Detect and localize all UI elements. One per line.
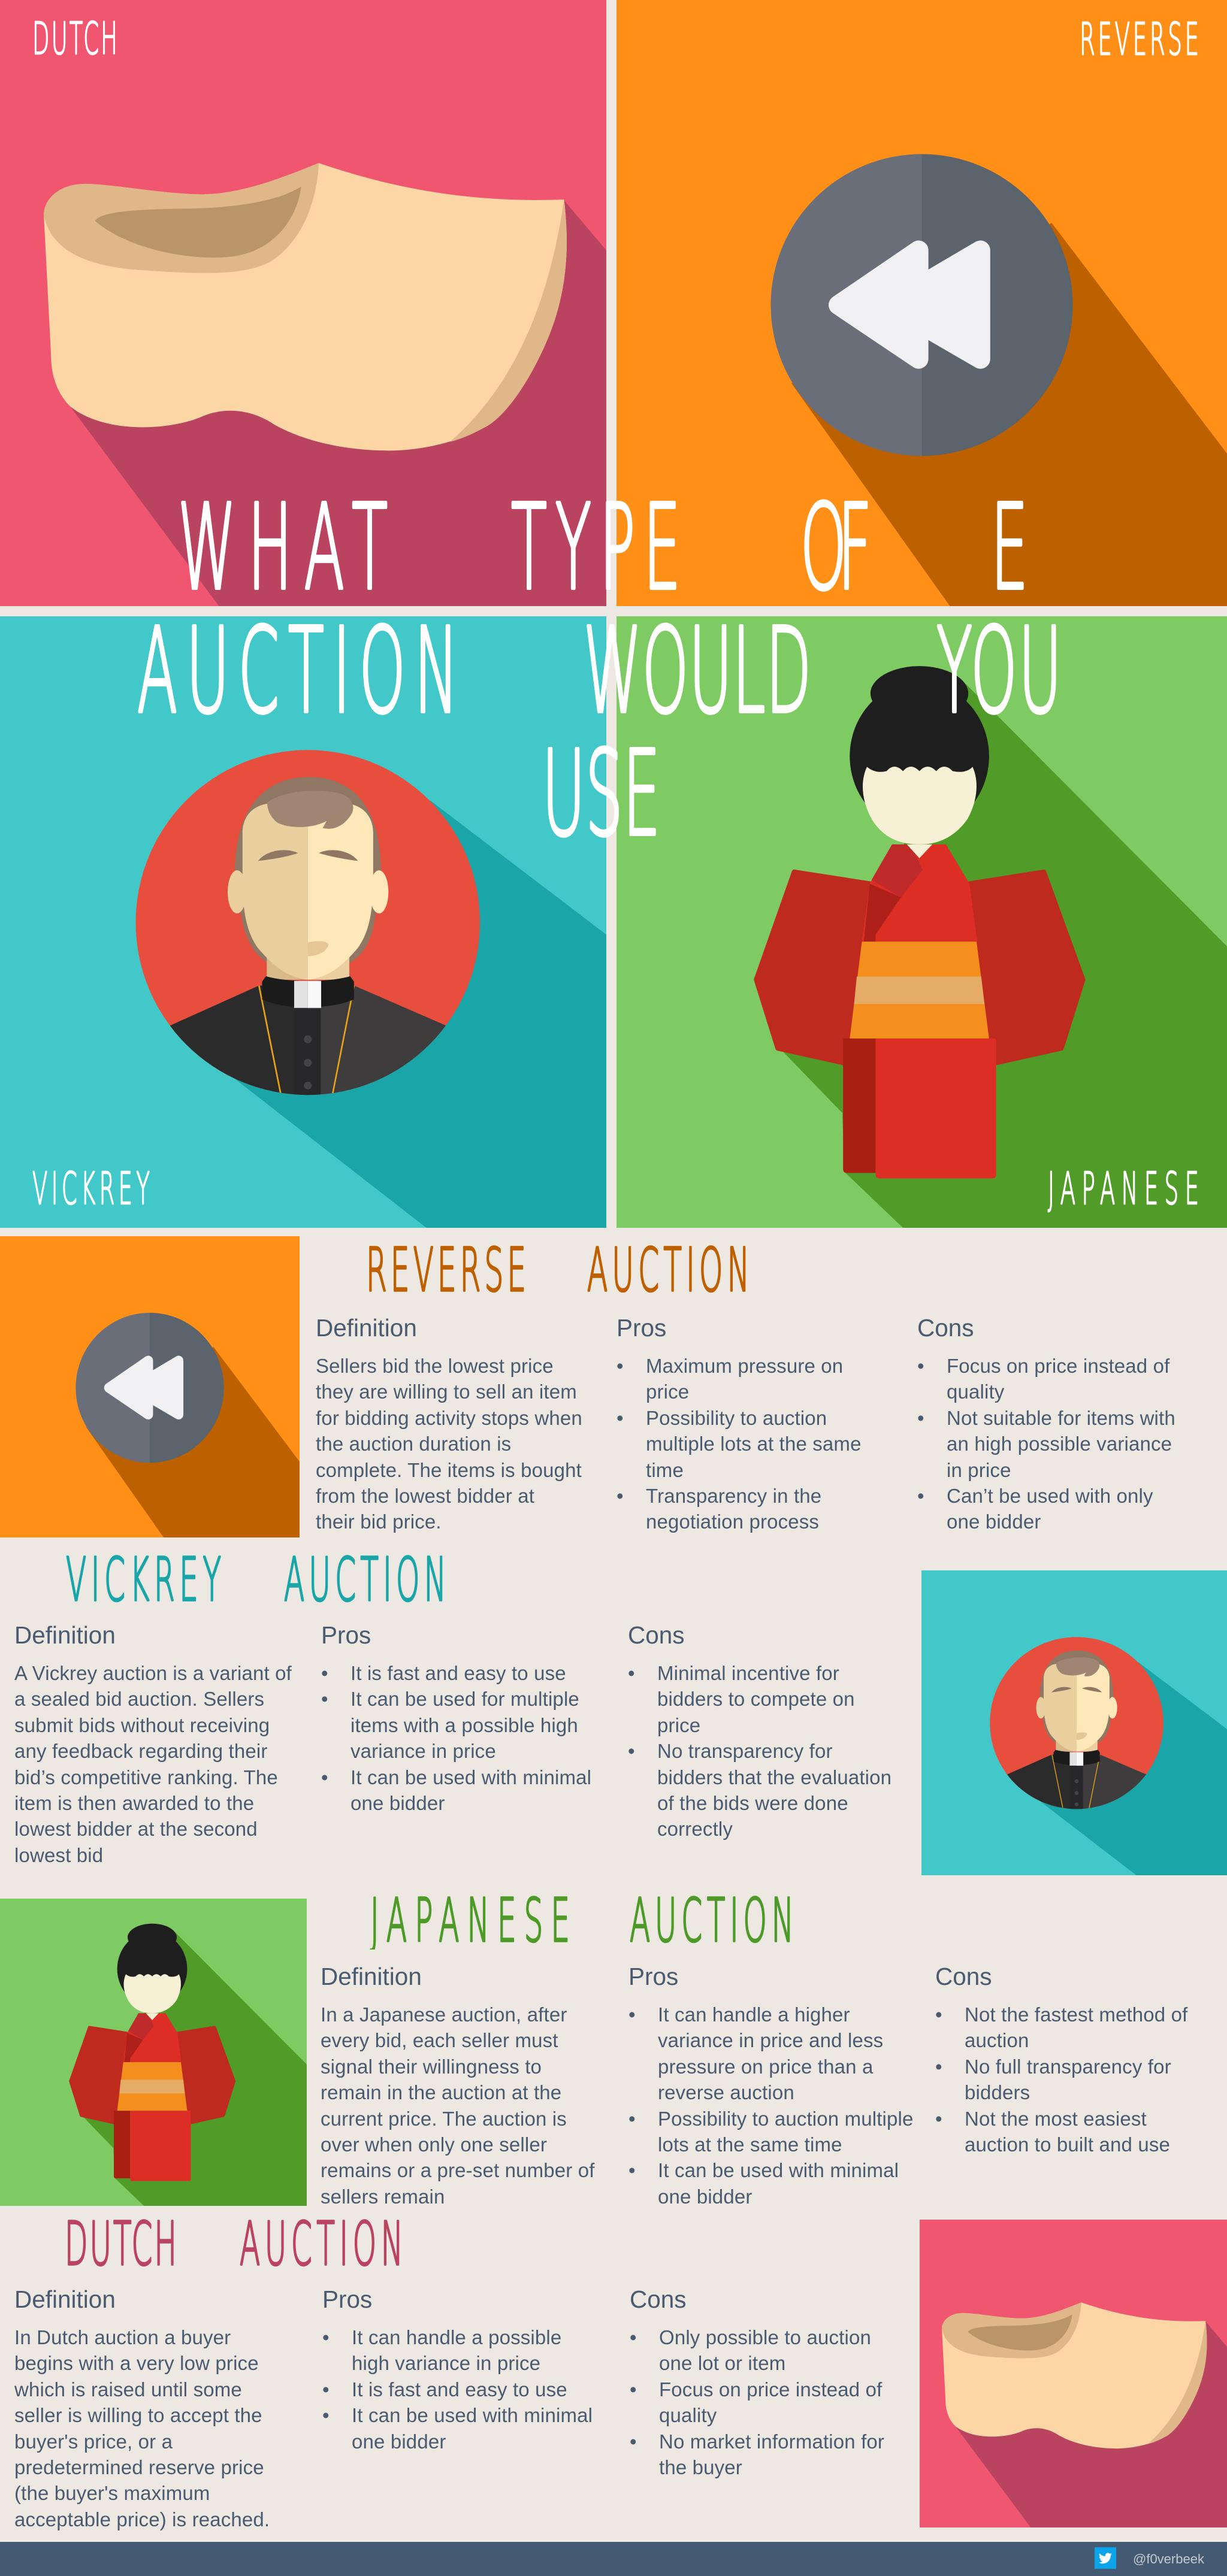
text: Reverse cons: Not suitable for items with <box>947 1407 1175 1429</box>
text: Reverse pros: Maximum pressure on <box>646 1355 843 1377</box>
panel: Dutch hero <box>0 0 606 606</box>
text: Vickrey pros: It can be used with minimal <box>350 1766 591 1788</box>
text: Dutch pros: It can be used with minimal <box>352 2404 593 2426</box>
text: Dutch definition: predetermined reserve price <box>14 2456 264 2478</box>
text: Vickrey definition: Definition <box>14 1621 116 1649</box>
text: Japanese definition <box>321 1963 595 2208</box>
text: Vickrey definition: bid’s competitive ranking. The <box>14 1766 278 1788</box>
panel: Japanese hero <box>616 616 1227 1228</box>
text: Reverse cons <box>917 1314 1175 1533</box>
text: Japanese cons <box>935 1963 1187 2156</box>
text: Vickrey pros: • <box>321 1766 328 1788</box>
text: Japanese pros: one bidder <box>658 2185 752 2208</box>
title: TYPE <box>511 479 681 616</box>
text: Reverse pros: • <box>616 1355 624 1377</box>
text: Reverse cons: Cons <box>917 1314 974 1342</box>
text: Japanese pros: variance in price and less <box>658 2029 883 2051</box>
text: Japanese cons: bidders <box>965 2081 1030 2103</box>
text: Dutch cons: quality <box>659 2404 717 2426</box>
panel: Reverse hero <box>616 0 1227 606</box>
text: Reverse pros: multiple lots at the same <box>646 1433 862 1455</box>
text: Dutch definition: (the buyer's maximum <box>14 2482 210 2504</box>
text: Japanese definition: sellers remain <box>321 2185 445 2208</box>
text: Japanese definition: every bid, each seller must <box>321 2029 558 2051</box>
text: Dutch cons: one lot or item <box>659 2352 785 2374</box>
text: Reverse definition: their bid price. <box>316 1511 442 1533</box>
text: Vickrey definition: lowest bidder at the second <box>14 1818 258 1840</box>
text: Reverse definition: complete. The items is bought <box>316 1459 582 1481</box>
text: Dutch definition: acceptable price) is reached. <box>14 2508 270 2530</box>
text: Japanese cons: No full transparency for <box>965 2056 1171 2078</box>
text: Reverse pros: price <box>646 1381 689 1403</box>
text: Dutch cons: No market information for <box>659 2430 884 2453</box>
text: Dutch definition: begins with a very low price <box>14 2352 259 2374</box>
text: Vickrey definition: submit bids without receiving <box>14 1714 270 1736</box>
text: Reverse pros: • <box>616 1485 624 1507</box>
text: Vickrey definition: a sealed bid auction. Sellers <box>14 1688 264 1710</box>
text: Reverse cons: • <box>917 1485 924 1507</box>
text: Japanese cons: Not the fastest method of <box>965 2003 1187 2026</box>
text: Vickrey cons: price <box>657 1714 700 1736</box>
text: Japanese pros: pressure on price than a <box>658 2056 873 2078</box>
text: Reverse definition: for bidding activity stops when <box>316 1407 582 1429</box>
text: Japanese definition: current price. The auction is <box>321 2108 567 2130</box>
text: Dutch cons: • <box>630 2430 637 2453</box>
text: Vickrey pros: • <box>321 1688 328 1710</box>
text: Japanese pros <box>628 1963 914 2208</box>
text: Reverse pros: • <box>616 1407 624 1429</box>
text: Dutch cons: Only possible to auction <box>659 2326 871 2348</box>
text: Dutch cons: • <box>630 2326 637 2348</box>
text: Japanese definition: Definition <box>321 1963 422 1990</box>
text: Vickrey pros: It is fast and easy to use <box>350 1662 566 1684</box>
text: Vickrey pros: • <box>321 1662 328 1684</box>
title: YOU <box>936 603 1062 740</box>
title: WHAT <box>178 479 388 616</box>
text: Dutch cons: • <box>630 2378 637 2401</box>
text: Japanese definition: over when only one seller <box>321 2133 547 2156</box>
text: Dutch definition: Definition <box>14 2286 116 2313</box>
text: Vickrey pros: variance in price <box>350 1740 496 1762</box>
text: Japanese cons: • <box>935 2003 942 2026</box>
text: Dutch cons: the buyer <box>659 2456 742 2478</box>
text: Japanese cons: • <box>935 2108 942 2130</box>
text: Dutch pros: one bidder <box>352 2430 446 2453</box>
text: Reverse cons: one bidder <box>947 1511 1041 1533</box>
text: Japanese cons: • <box>935 2056 942 2078</box>
footer bar <box>0 2542 1227 2576</box>
text: Reverse definition: from the lowest bidder at <box>316 1485 534 1507</box>
text: Vickrey cons: bidders that the evaluation <box>657 1766 891 1788</box>
text: Vickrey definition: item is then awarded to the <box>14 1792 254 1814</box>
text: Reverse definition: Sellers bid the lowest price <box>316 1355 554 1377</box>
text: Japanese pros: It can be used with minimal <box>658 2159 899 2181</box>
text: Reverse cons: an high possible variance <box>947 1433 1172 1455</box>
text: Dutch definition: seller is willing to accept the <box>14 2404 262 2426</box>
title: OF <box>800 479 872 616</box>
text: Japanese definition: remains or a pre-set number of <box>321 2159 595 2181</box>
text: Japanese pros: lots at the same time <box>658 2133 842 2156</box>
text: Dutch definition: buyer's price, or a <box>14 2430 173 2453</box>
text: Reverse cons: • <box>917 1407 924 1429</box>
text: Dutch definition <box>14 2286 270 2530</box>
text: Vickrey pros: one bidder <box>350 1792 445 1814</box>
text: Japanese cons: Not the most easiest <box>965 2108 1147 2130</box>
text: Vickrey cons: No transparency for <box>657 1740 833 1762</box>
text: Japanese cons: Cons <box>935 1963 992 1990</box>
text: Reverse pros: negotiation process <box>646 1511 819 1533</box>
text: Dutch cons: Focus on price instead of <box>659 2378 882 2401</box>
text: Reverse pros: Pros <box>616 1314 666 1342</box>
text: Vickrey pros: items with a possible high <box>350 1714 578 1736</box>
text: Japanese pros: • <box>628 2108 636 2130</box>
text: Vickrey cons: bidders to compete on <box>657 1688 855 1710</box>
text: Reverse definition: Definition <box>316 1314 417 1342</box>
text: Reverse definition: they are willing to sell an item <box>316 1381 577 1403</box>
text: Reverse pros: Transparency in the <box>646 1485 821 1507</box>
text: twitter handle: @f0verbeek <box>1133 2551 1204 2566</box>
text: Dutch pros <box>322 2286 593 2453</box>
text: Dutch pros: Pros <box>322 2286 372 2313</box>
text: Japanese cons: auction to built and use <box>965 2133 1170 2156</box>
text: Vickrey cons: of the bids were done <box>657 1792 848 1814</box>
text: Dutch pros: high variance in price <box>352 2352 540 2374</box>
text: Vickrey pros: It can be used for multiple <box>350 1688 579 1710</box>
text: Dutch definition: In Dutch auction a buyer <box>14 2326 231 2348</box>
panel: Vickrey hero <box>0 616 606 1228</box>
text: Japanese definition: remain in the auction at the <box>321 2081 561 2103</box>
text: Dutch pros: It can handle a possible <box>352 2326 561 2348</box>
text: Dutch cons: Cons <box>630 2286 687 2313</box>
text: Vickrey cons: Cons <box>628 1621 685 1649</box>
title: AUCTION <box>137 603 458 740</box>
text: Reverse pros: Possibility to auction <box>646 1407 827 1429</box>
text: Vickrey cons: • <box>628 1740 635 1762</box>
text: Reverse pros: time <box>646 1459 684 1481</box>
text: Reverse definition <box>316 1314 582 1533</box>
text: Japanese definition: In a Japanese auction, after <box>321 2003 567 2026</box>
text: Vickrey definition <box>14 1621 292 1866</box>
text: Reverse cons: • <box>917 1355 924 1377</box>
panel: Reverse auction image <box>0 1236 300 1537</box>
heading: Dutch auction <box>65 2215 403 2270</box>
text: Japanese cons: auction <box>965 2029 1029 2051</box>
text: Reverse cons: Focus on price instead of <box>947 1355 1169 1377</box>
title: WOULD <box>584 603 811 740</box>
text: Vickrey pros <box>321 1621 591 1814</box>
text: Vickrey definition: lowest bid <box>14 1844 103 1866</box>
text: Dutch pros: • <box>322 2378 330 2401</box>
text: Vickrey cons: correctly <box>657 1818 733 1840</box>
text: Reverse cons: quality <box>947 1381 1004 1403</box>
text: Vickrey pros: Pros <box>321 1621 371 1649</box>
text: Dutch definition: which is raised until some <box>14 2378 242 2401</box>
text: Japanese pros: Pros <box>628 1963 678 1990</box>
text: Japanese pros: It can handle a higher <box>658 2003 850 2026</box>
heading: Japanese auction <box>370 1890 794 1950</box>
text: Japanese pros: Possibility to auction multiple <box>658 2108 914 2130</box>
text: Reverse cons: Can’t be used with only <box>947 1485 1153 1507</box>
text: Japanese pros: • <box>628 2003 636 2026</box>
heading: Vickrey auction <box>66 1550 446 1605</box>
text: Reverse pros <box>616 1314 862 1533</box>
text: Vickrey cons <box>628 1621 891 1840</box>
text: Dutch cons <box>630 2286 884 2478</box>
text: Dutch pros: It is fast and easy to use <box>352 2378 567 2401</box>
text: Dutch pros: • <box>322 2326 330 2348</box>
text: Reverse definition: the auction duration is <box>316 1433 511 1455</box>
panel: Dutch auction image <box>920 2220 1227 2527</box>
icon: twitter <box>1095 2547 1116 2569</box>
text: Vickrey cons: • <box>628 1662 635 1684</box>
text: Vickrey cons: Minimal incentive for <box>657 1662 839 1684</box>
heading: Reverse auction <box>366 1240 750 1295</box>
text: Dutch pros: • <box>322 2404 330 2426</box>
text: Vickrey definition: any feedback regarding their <box>14 1740 267 1762</box>
text: Japanese definition: signal their willingness to <box>321 2056 542 2078</box>
panel: Japanese auction image <box>0 1899 307 2206</box>
text: Japanese pros: reverse auction <box>658 2081 794 2103</box>
text: Japanese pros: • <box>628 2159 636 2181</box>
text: Vickrey definition: A Vickrey auction is a variant of <box>14 1662 292 1684</box>
panel: Vickrey auction image <box>921 1570 1227 1875</box>
title <box>137 479 1062 850</box>
text: Reverse cons: in price <box>947 1459 1011 1481</box>
title: E <box>991 479 1028 616</box>
